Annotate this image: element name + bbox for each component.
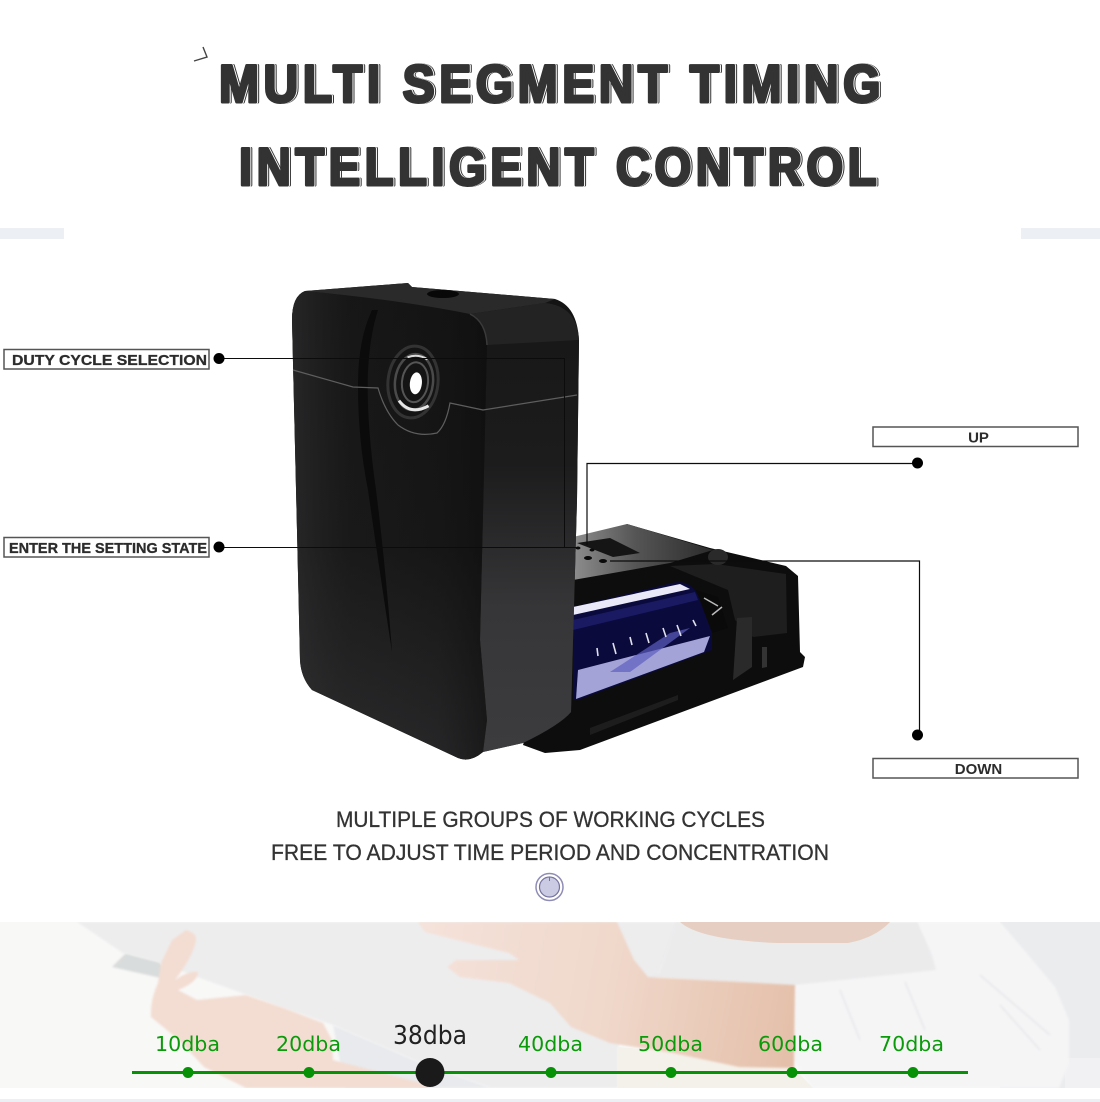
dot: setting state	[214, 542, 224, 552]
bedding shadow	[112, 954, 161, 978]
scale labels	[155, 1032, 944, 1056]
noise scale	[132, 1021, 968, 1087]
title	[219, 55, 885, 197]
bottom band	[0, 1099, 1100, 1102]
leader line: up	[587, 464, 918, 545]
icon: knob	[536, 874, 563, 900]
label: duty cycle selection: DUTY CYCLE SELECTION	[12, 352, 207, 369]
scale labels: 20dba	[276, 1032, 341, 1056]
scale labels: 10dba	[155, 1032, 220, 1056]
dot: duty cycle	[214, 353, 224, 364]
base housing	[523, 524, 805, 753]
caption text: MULTIPLE GROUPS OF WORKING CYCLES	[336, 807, 765, 832]
right accent bar	[1021, 228, 1100, 239]
label: down	[873, 758, 1078, 778]
caption text	[271, 807, 829, 865]
scale line	[132, 1071, 968, 1074]
speaker vent	[383, 342, 443, 422]
leader line: duty cycle selection	[219, 358, 564, 547]
icon: small chevron mark	[194, 47, 207, 61]
scale labels: 70dba	[879, 1032, 944, 1056]
water bottle	[573, 582, 728, 700]
neck	[680, 922, 890, 943]
shirt chest	[658, 922, 935, 985]
lower white pillow	[618, 1047, 813, 1088]
current level label: 38dba	[393, 1021, 467, 1051]
control buttons	[576, 546, 607, 563]
label: up	[873, 427, 1078, 446]
leader line: enter the setting state	[219, 546, 577, 548]
title: INTELLIGENT CONTROL	[239, 138, 881, 197]
button peg	[708, 549, 728, 565]
dot: down	[912, 730, 923, 740]
left accent bar	[0, 228, 64, 239]
scale points	[182, 1067, 918, 1078]
label: down: DOWN	[955, 761, 1002, 778]
product: open aroma diffuser	[292, 283, 805, 760]
title: MULTI SEGMENT TIMING	[219, 55, 885, 114]
scale labels: 60dba	[758, 1032, 823, 1056]
sleeve folds	[840, 975, 1050, 1050]
left hand	[151, 930, 432, 1088]
label: up: UP	[968, 430, 989, 446]
right arm and hand	[418, 922, 795, 1068]
lower sheet shade	[333, 1025, 491, 1088]
label: enter the setting state: ENTER THE SETTING STATE	[9, 541, 207, 557]
scale labels: 50dba	[638, 1032, 703, 1056]
pillow	[77, 922, 680, 1088]
current level marker	[416, 1058, 444, 1087]
sleeve	[826, 924, 1068, 1087]
photo: woman holding pillow	[0, 922, 1100, 1088]
scale labels: 40dba	[518, 1032, 583, 1056]
right background	[1000, 922, 1100, 1088]
leader line: down	[610, 561, 920, 735]
front cover body	[292, 283, 579, 760]
dot: up	[912, 458, 923, 468]
caption text: FREE TO ADJUST TIME PERIOD AND CONCENTRATION	[271, 840, 829, 865]
